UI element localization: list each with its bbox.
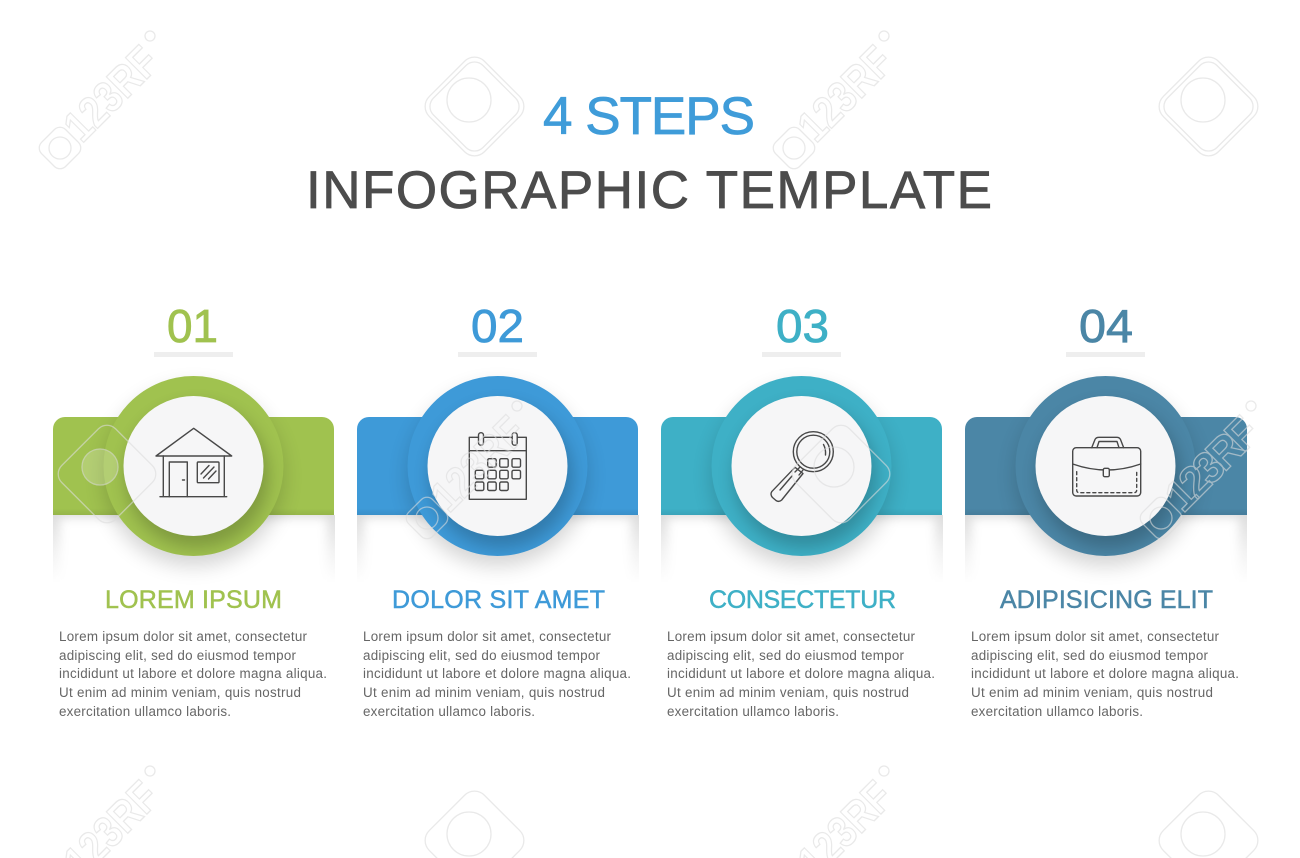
coloured band	[661, 417, 942, 515]
number 01: 01	[167, 300, 218, 352]
description: Lorem ipsum dolor sit amet, consectetur	[971, 629, 1220, 644]
watermark: top row logos	[36, 31, 1264, 172]
card shadow	[661, 515, 943, 563]
heading: DOLOR SIT AMET	[392, 586, 605, 614]
watermark: middle row logos: 123RF	[421, 407, 535, 521]
step 1	[53, 300, 335, 719]
title: 4 STEPS	[543, 87, 755, 146]
heading: LOREM IPSUM	[105, 586, 282, 614]
description: exercitation ullamco laboris.	[59, 704, 231, 719]
number 03: 03	[776, 300, 829, 352]
watermark: middle row logos	[53, 401, 1269, 542]
description: Lorem ipsum dolor sit amet, consectetur	[59, 629, 308, 644]
coloured band	[53, 417, 334, 515]
outer circle	[104, 376, 284, 556]
description: adipiscing elit, sed do eiusmod tempor	[667, 648, 905, 663]
card shadow	[357, 515, 639, 563]
watermark: top row logos: 123RF	[788, 37, 902, 151]
description: incididunt ut labore et dolore magna aliqua.	[363, 666, 631, 681]
number 04: 04	[1079, 300, 1133, 352]
title: INFOGRAPHIC TEMPLATE	[306, 161, 992, 220]
description: incididunt ut labore et dolore magna aliqua.	[59, 666, 327, 681]
outer circle	[712, 376, 892, 556]
coloured band	[965, 417, 1247, 515]
inner circle	[1036, 396, 1176, 536]
inner circle	[732, 396, 872, 536]
inner circle	[428, 396, 568, 536]
description: Ut enim ad minim veniam, quis nostrud	[59, 685, 301, 700]
description	[971, 629, 1239, 719]
description: adipiscing elit, sed do eiusmod tempor	[363, 648, 601, 663]
description: adipiscing elit, sed do eiusmod tempor	[59, 648, 297, 663]
card shadow	[965, 515, 1247, 563]
description: Ut enim ad minim veniam, quis nostrud	[363, 685, 605, 700]
step 2	[357, 300, 639, 719]
outer circle	[408, 376, 588, 556]
icon: calendar	[469, 433, 526, 499]
step 4	[965, 300, 1247, 719]
description: exercitation ullamco laboris.	[363, 704, 535, 719]
description: incididunt ut labore et dolore magna aliqua.	[971, 666, 1239, 681]
watermark: middle row logos: 123RF	[1155, 407, 1269, 521]
outer circle	[1016, 376, 1196, 556]
icon: magnifying glass	[771, 432, 833, 501]
number 02: 02	[471, 300, 524, 352]
description: incididunt ut labore et dolore magna aliqua.	[667, 666, 935, 681]
inner circle	[124, 396, 264, 536]
description: adipiscing elit, sed do eiusmod tempor	[971, 648, 1209, 663]
description: Lorem ipsum dolor sit amet, consectetur	[667, 629, 916, 644]
card shadow	[53, 515, 335, 563]
description	[59, 629, 327, 719]
watermark: top row logos: 123RF	[54, 37, 168, 151]
description	[363, 629, 631, 719]
description: Ut enim ad minim veniam, quis nostrud	[971, 685, 1213, 700]
step 3	[661, 300, 943, 719]
watermark: bottom row logos	[54, 766, 1264, 858]
heading: CONSECTETUR	[709, 586, 896, 614]
description: Lorem ipsum dolor sit amet, consectetur	[363, 629, 612, 644]
heading: ADIPISICING ELIT	[1000, 586, 1213, 614]
icon: briefcase	[1073, 437, 1141, 496]
title	[306, 87, 992, 220]
description	[667, 629, 935, 719]
description: exercitation ullamco laboris.	[971, 704, 1143, 719]
description: Ut enim ad minim veniam, quis nostrud	[667, 685, 909, 700]
icon: house	[156, 428, 232, 497]
description: exercitation ullamco laboris.	[667, 704, 839, 719]
coloured band	[357, 417, 638, 515]
